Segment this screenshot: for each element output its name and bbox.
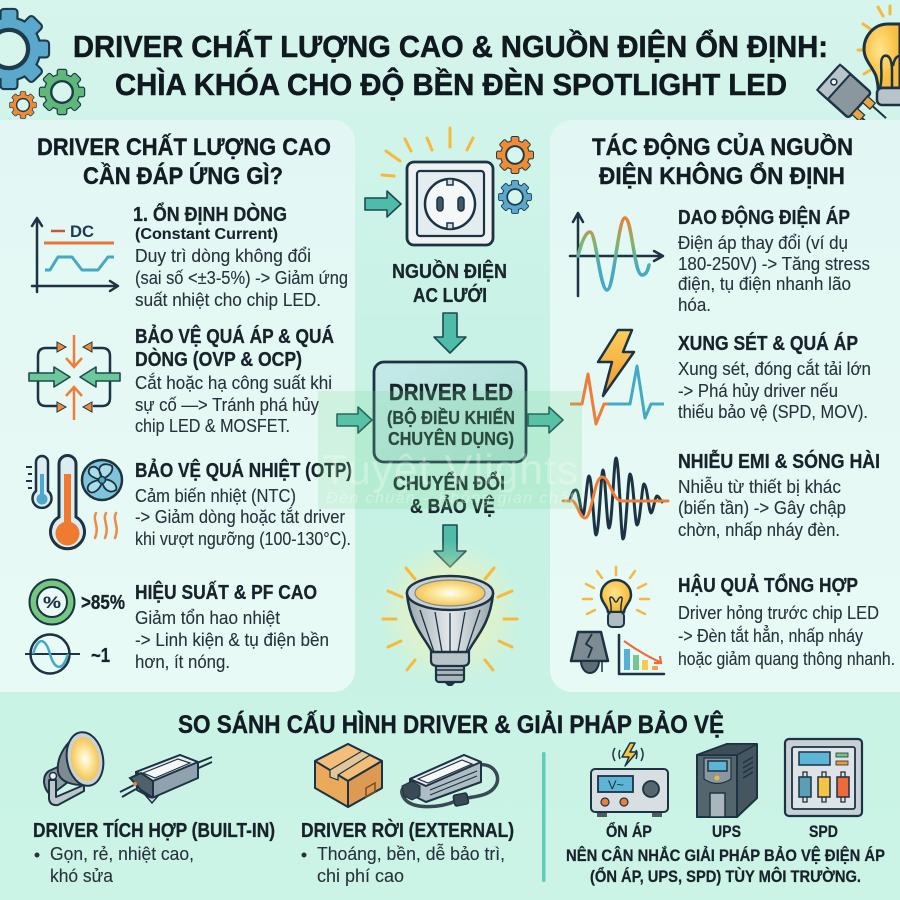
- driver LED box: [374, 362, 526, 462]
- text block: voltage fluctuation: 180-250V) -> Tăng stress: [678, 253, 870, 274]
- icon: constant current chart: [32, 218, 118, 292]
- arrow: out of driver: [528, 407, 563, 433]
- title: DRIVER CHẤT LƯỢNG CAO & NGUỒN ĐIỆN ỔN ĐỊNH:: [73, 28, 828, 64]
- text block: voltage fluctuation: Điện áp thay đổi (ví dụ: [678, 232, 848, 253]
- label: AC mains: [392, 259, 507, 307]
- text block: recommendation: (ỔN ÁP, UPS, SPD) TÙY MÔI TRƯỜNG.: [590, 867, 861, 886]
- watermark: Đèn chuẩn – Không gian chất: [326, 489, 575, 507]
- heading: unstable power impact: TÁC ĐỘNG CỦA NGUỒN: [592, 132, 853, 161]
- icon: thermometers and fan: [26, 456, 122, 549]
- label: AC mains: AC LƯỚI: [413, 283, 487, 307]
- text block: constant current: 1. ỔN ĐỊNH DÒNG: [133, 202, 287, 226]
- watermark: [318, 391, 582, 509]
- arrow: into socket: [365, 191, 401, 217]
- icon: cardboard box: [315, 744, 382, 807]
- text block: lightning surge: [678, 332, 871, 422]
- text block: over voltage and over current protection: sự cố —> Tránh phá hủy: [135, 394, 320, 415]
- heading: unstable power impact: ĐIỆN KHÔNG ỔN ĐỊNH: [599, 162, 845, 190]
- text block: over temperature protection: khi vượt ngưỡng (100-130°C).: [135, 528, 351, 549]
- heading: driver requirements: DRIVER CHẤT LƯỢNG CAO: [37, 133, 331, 161]
- icon: efficiency and power factor: [25, 580, 125, 674]
- icon: constant current chart: DC: [70, 222, 94, 241]
- text block: over temperature protection: Cảm biến nhiệt (NTC): [135, 485, 296, 506]
- label: AC mains: NGUỒN ĐIỆN: [392, 259, 507, 283]
- icon: integrated driver module: [120, 755, 212, 803]
- text block: lightning surge: thiếu bảo vệ (SPD, MOV).: [678, 401, 868, 422]
- icon: efficiency and power factor: %: [43, 593, 61, 612]
- driver LED box: DRIVER LED: [389, 379, 513, 405]
- text block: failure consequences: [678, 573, 895, 669]
- text block: over voltage and over current protection: Cắt hoặc hạ công suất khi: [135, 372, 332, 393]
- driver LED box: (BỘ ĐIỀU KHIỂN: [387, 407, 515, 428]
- arrow: driver to lamp: [434, 525, 466, 567]
- icon: light bulb and transistor top right: [817, 6, 900, 137]
- text block: external driver: [301, 818, 514, 886]
- label: convert and protect: CHUYỂN ĐỔI: [393, 471, 505, 495]
- divider: [542, 752, 546, 882]
- heading: driver requirements: CẦN ĐÁP ỨNG GÌ?: [83, 162, 283, 190]
- text block: built-in driver: DRIVER TÍCH HỢP (BUILT-IN): [33, 819, 275, 842]
- text block: EMI noise: (biến tần) -> Gây chập: [678, 497, 846, 518]
- text block: external driver: Thoáng, bền, dễ bảo trì,: [317, 843, 505, 864]
- text block: failure consequences: Driver hỏng trước chip LED: [678, 602, 879, 623]
- arrow: into driver: [337, 407, 372, 433]
- arrow: socket to driver: [434, 313, 466, 353]
- icon: UPS: [697, 744, 757, 817]
- icon: AC power socket: [382, 128, 533, 245]
- text block: failure consequences: HẬU QUẢ TỔNG HỢP: [678, 573, 858, 597]
- icon: external driver with cable: [402, 755, 498, 807]
- icon: efficiency and power factor: ~1: [91, 645, 110, 667]
- label: device names: SPD: [809, 822, 838, 841]
- heading: driver requirements: [37, 133, 331, 190]
- panel: driver requirements: [0, 120, 355, 692]
- icon: failure consequences: [571, 567, 664, 674]
- text block: voltage fluctuation: DAO ĐỘNG ĐIỆN ÁP: [678, 205, 850, 229]
- text block: EMI noise: [678, 449, 880, 540]
- panel: protection solutions: [566, 739, 885, 886]
- title: [73, 28, 828, 102]
- text block: recommendation: [566, 846, 885, 886]
- panel: built-in driver: [33, 729, 275, 886]
- icon: LED spotlight bulb: [378, 540, 522, 686]
- driver LED box: CHUYÊN DỤNG): [388, 428, 514, 449]
- text block: efficiency and power factor: HIỆU SUẤT & PF CAO: [135, 580, 317, 604]
- text block: EMI noise: chờn, nhấp nháy đèn.: [678, 519, 840, 540]
- text block: voltage fluctuation: hóa.: [678, 294, 711, 315]
- text block: efficiency and power factor: [135, 580, 329, 672]
- text block: external driver: chi phí cao: [317, 865, 404, 886]
- text block: external driver: DRIVER RỜI (EXTERNAL): [301, 818, 514, 842]
- text block: built-in driver: [33, 819, 275, 886]
- center flow diagram: [337, 128, 563, 686]
- text block: over temperature protection: [135, 458, 352, 549]
- text block: over voltage and over current protection: chip LED & MOSFET.: [135, 415, 290, 436]
- label: device names: UPS: [712, 822, 741, 841]
- text block: voltage fluctuation: điện, tụ điện nhanh lão: [678, 273, 851, 294]
- text block: built-in driver: Gọn, rẻ, nhiệt cao,: [50, 843, 194, 864]
- icon: voltage stabilizer: [591, 743, 668, 817]
- text block: over temperature protection: -> Giảm dòng hoặc tắt driver: [135, 506, 345, 527]
- text block: constant current: (sai số <±3-5%) -> Giảm ứng: [135, 267, 348, 288]
- panel: external driver: [301, 744, 514, 886]
- text block: constant current: [133, 202, 348, 310]
- watermark: Tuyệt Vlights: [322, 446, 578, 493]
- icon: voltage fluctuation wave: [570, 213, 663, 296]
- heading: unstable power impact: [592, 132, 853, 190]
- text block: efficiency and power factor: hơn, ít nóng.: [135, 651, 230, 672]
- text block: lightning surge: -> Phá hủy driver nếu: [678, 380, 838, 401]
- panel: unstable power impact: [550, 120, 900, 692]
- label: convert and protect: & BẢO VỆ: [410, 494, 495, 518]
- label: device names: [606, 822, 838, 841]
- text block: lightning surge: Xung sét, đóng cắt tải lớn: [678, 358, 871, 379]
- text block: over voltage and over current protection: BẢO VỆ QUÁ ÁP & QUÁ: [135, 324, 334, 348]
- text block: constant current: Duy trì dòng không đổi: [135, 245, 311, 266]
- text block: efficiency and power factor: -> Linh kiện & tụ điện bền: [135, 629, 329, 650]
- text block: over voltage and over current protection: [135, 324, 334, 436]
- label: convert and protect: [393, 471, 505, 518]
- icon: EMI noise wave: [563, 458, 668, 539]
- text block: constant current: suất nhiệt cho chip LED.: [135, 289, 321, 310]
- text block: lightning surge: XUNG SÉT & QUÁ ÁP: [678, 332, 858, 355]
- icon: lightning surge: [570, 330, 664, 424]
- text block: constant current: (Constant Current): [135, 226, 278, 243]
- icon: SPD panel: [785, 739, 862, 816]
- text block: failure consequences: -> Đèn tắt hẳn, nhấp nháy: [678, 625, 864, 646]
- text block: built-in driver: khó sửa: [50, 865, 114, 886]
- text block: over temperature protection: BẢO VỆ QUÁ NHIỆT (OTP): [135, 458, 352, 482]
- icon: spotlight: [44, 729, 107, 805]
- icon: over voltage and over current protection: [29, 335, 120, 420]
- icon: efficiency and power factor: >85%: [81, 592, 125, 614]
- title: CHÌA KHÓA CHO ĐỘ BỀN ĐÈN SPOTLIGHT LED: [115, 66, 787, 102]
- text block: voltage fluctuation: [678, 205, 870, 315]
- text block: efficiency and power factor: Giảm tổn hao nhiệt: [135, 607, 280, 628]
- text block: EMI noise: Nhiễu từ thiết bị khác: [678, 476, 841, 497]
- section title: comparison: SO SÁNH CẤU HÌNH DRIVER & GIẢI PHÁP BẢO VỆ: [178, 709, 724, 739]
- text block: over voltage and over current protection: DÒNG (OVP & OCP): [135, 347, 302, 371]
- text block: EMI noise: NHIỄU EMI & SÓNG HÀI: [678, 449, 880, 473]
- icon: voltage stabilizer: V~: [608, 778, 624, 792]
- label: device names: ỔN ÁP: [606, 822, 652, 841]
- icon: gears top left: [0, 10, 84, 118]
